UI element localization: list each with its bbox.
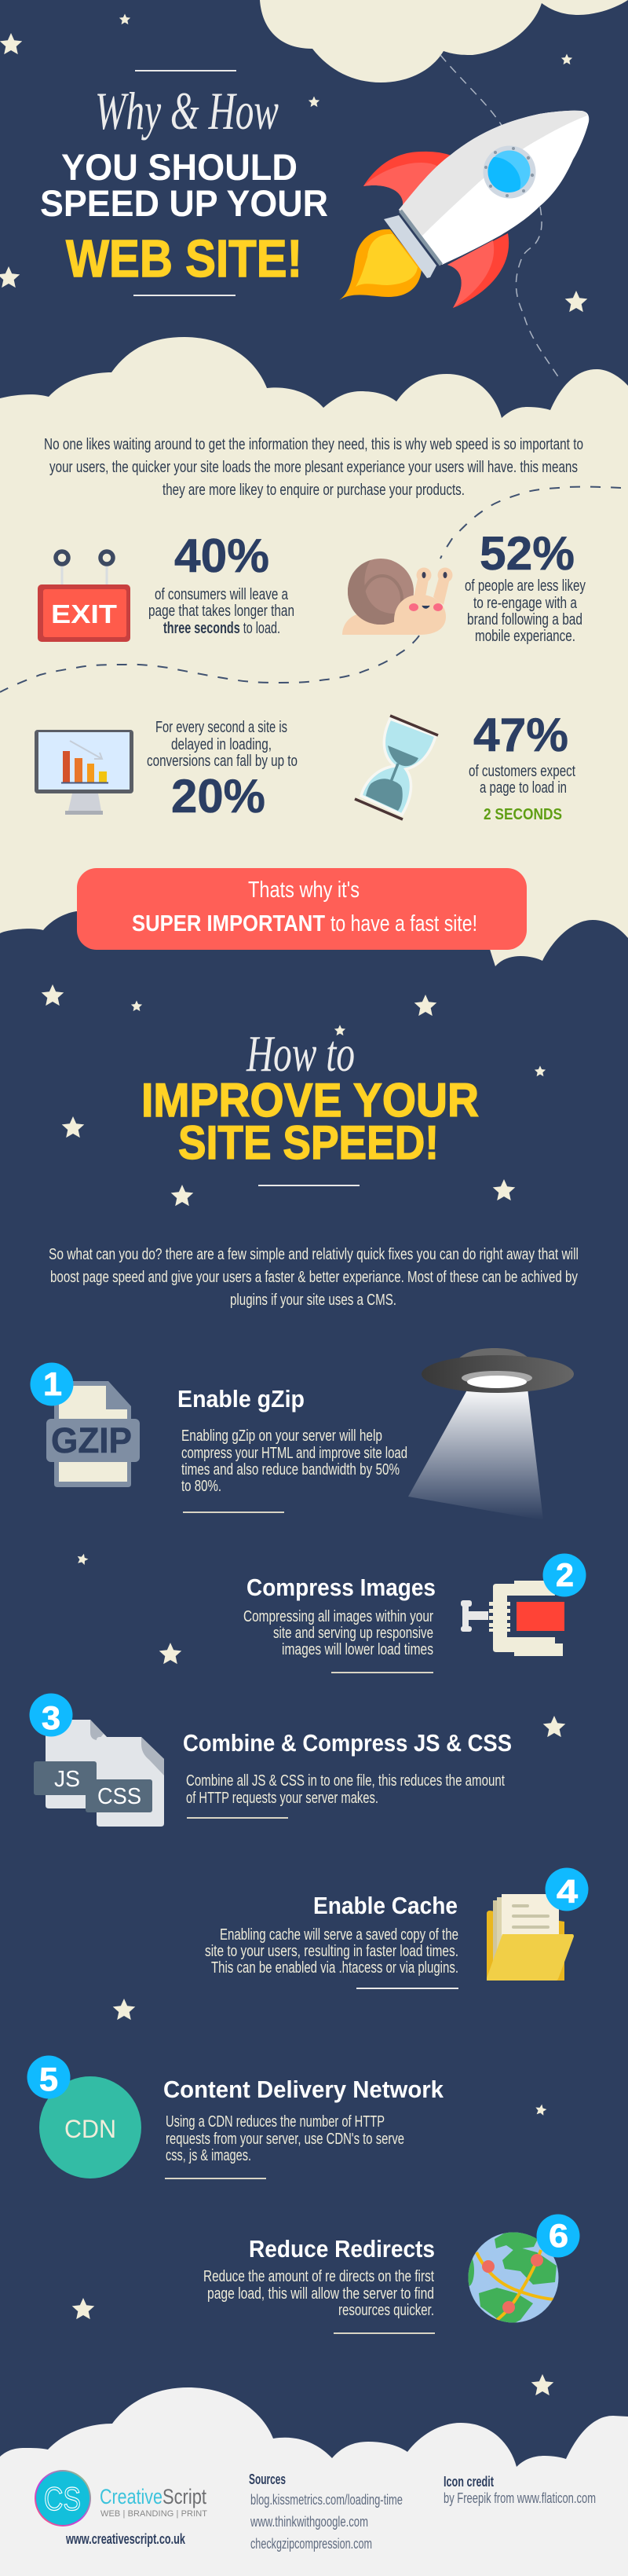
callout pill: SUPER IMPORTANT (132, 911, 325, 936)
icon: js and css files: JS (54, 1767, 80, 1792)
badge 1: 1 (43, 1365, 62, 1402)
step 4: enable cache: Enable Cache (313, 1892, 458, 1919)
stat: 52 percent: mobile experiance. (475, 628, 575, 645)
badge 3: 3 (42, 1699, 60, 1736)
cream section with cloud edge (0, 337, 628, 974)
hero title (40, 70, 328, 296)
callout pill: to have a fast site! (330, 911, 477, 936)
badge 5 (27, 2055, 71, 2099)
icon: gzip file: GZIP (51, 1420, 132, 1460)
icon: rocket (339, 111, 589, 308)
stat: 20 percent: For every second a site is (155, 719, 287, 736)
stat: 40 percent (148, 529, 294, 637)
step 1: enable gzip: to 80%. (181, 1478, 221, 1495)
step 3: combine and compress (183, 1729, 512, 1819)
stat: 47 percent: 47% (473, 709, 568, 761)
step 2: compress images: Compress Images (246, 1574, 436, 1601)
badge 3 (30, 1694, 72, 1736)
step 5: content delivery network: css, js & images. (166, 2147, 251, 2164)
section heading: How to (246, 1025, 355, 1083)
step 6: reduce redirects (203, 2235, 435, 2334)
step 6: reduce redirects: resources quicker. (338, 2302, 434, 2319)
sources: Sources (249, 2472, 286, 2487)
icon: clamp compressing image (461, 1581, 564, 1656)
step 2: compress images: site and serving up responsive (273, 1625, 433, 1642)
stat: 40 percent: page that takes longer than (148, 603, 294, 620)
sources (249, 2472, 403, 2552)
section intro paragraph: plugins if your site uses a CMS. (230, 1292, 396, 1309)
stat: 40 percent: 40% (174, 529, 269, 582)
step 3: combine and compress: Combine all JS & CSS in to one file, this reduces the amount (186, 1772, 505, 1790)
stat: 40 percent: of consumers will leave a (155, 586, 289, 603)
stat: 52 percent: brand following a bad (467, 611, 582, 628)
step 5: content delivery network: Content Delivery Network (163, 2076, 444, 2103)
dashed rocket trail (440, 55, 560, 380)
stat: 20 percent (147, 719, 298, 823)
icon: cdn circle: CDN (64, 2115, 116, 2143)
badge 1 (30, 1362, 74, 1406)
step 4: enable cache: This can be enabled via .htacess or via plugins. (211, 1959, 458, 1977)
step 6: reduce redirects: Reduce Redirects (249, 2235, 435, 2263)
badge 6: 6 (549, 2217, 568, 2254)
badge 4 (545, 1868, 589, 1911)
icon credit: Icon credit (444, 2474, 494, 2490)
step 5: content delivery network: Using a CDN reduces the number of HTTP (166, 2113, 385, 2131)
callout pill: Thats why it's (248, 878, 360, 903)
badge 2: 2 (556, 1556, 574, 1593)
title line: why and how: Why & How (95, 81, 279, 141)
logo: creativescript: CS (44, 2480, 81, 2517)
badge 5: 5 (39, 2061, 58, 2098)
stat: 20 percent: 20% (171, 770, 265, 823)
step 3: combine and compress: Combine & Compress JS & CSS (183, 1729, 512, 1757)
callout pill (77, 868, 527, 950)
stat: 47 percent: a page to load in (480, 779, 567, 797)
icon: snail (342, 559, 452, 635)
step 6: reduce redirects: Reduce the amount of re directs on the first (203, 2268, 434, 2285)
icon credit (444, 2474, 596, 2506)
title line: you should: YOU SHOULD (61, 146, 298, 188)
icon: exit sign (38, 551, 130, 642)
icon: gzip file (46, 1381, 140, 1487)
sources: checkgzipcompression.com (250, 2536, 372, 2552)
step 2: compress images: images will lower load times (282, 1641, 433, 1658)
stat: 47 percent: of customers expect (469, 763, 575, 780)
badge 4: 4 (557, 1873, 579, 1910)
logo: creativescript: Script (162, 2485, 206, 2508)
step 2: compress images: Compressing all images within your (243, 1608, 433, 1625)
stat: 20 percent: conversions can fall by up to (147, 753, 298, 770)
stars: how to section (42, 984, 546, 1206)
logo: creativescript: Creative (100, 2485, 162, 2508)
stat: 47 percent: 2 SECONDS (484, 806, 562, 823)
stat: 20 percent: delayed in loading, (171, 736, 272, 753)
step 1: enable gzip: Enabling gZip on your server will help (181, 1427, 382, 1445)
step 4: enable cache: Enabling cache will serve a saved copy of the (220, 1926, 458, 1944)
step 3: combine and compress: of HTTP requests your server makes. (186, 1790, 378, 1807)
step 4: enable cache (205, 1892, 458, 1989)
logo: creativescript (35, 2470, 207, 2547)
icon: exit sign: EXIT (51, 599, 117, 628)
title line: speed up your: SPEED UP YOUR (40, 182, 328, 224)
step 1: enable gzip: compress your HTML and improve site load (181, 1445, 407, 1462)
icon: folder with documents (487, 1894, 574, 1981)
section heading (141, 1025, 479, 1186)
top cloud (260, 0, 628, 82)
section heading: SITE SPEED! (178, 1116, 439, 1169)
step 5: content delivery network (163, 2076, 444, 2179)
section intro paragraph (49, 1246, 579, 1309)
logo: creativescript: www.creativescript.co.uk (65, 2531, 186, 2547)
navy section cloud (0, 911, 628, 2576)
footer cloud (0, 2387, 628, 2576)
badge 2 (543, 1554, 586, 1596)
step 1: enable gzip: times and also reduce bandwidth by 50% (181, 1461, 400, 1479)
icon: ufo with light beam (408, 1348, 574, 1520)
step 4: enable cache: site to your users, resulting in faster load times. (205, 1943, 458, 1960)
stat: 52 percent: of people are less likey (465, 577, 586, 595)
intro paragraph (44, 436, 583, 499)
stars: hero (0, 14, 587, 312)
icon: cdn circle (39, 2076, 141, 2178)
icon: js and css files (34, 1720, 164, 1827)
stat: 52 percent: to re-engage with a (473, 595, 578, 612)
stat: 40 percent: three seconds to load. (163, 620, 280, 637)
step 2: compress images (243, 1574, 436, 1673)
step 1: enable gzip (177, 1385, 407, 1513)
icon: globe with routes (468, 2233, 559, 2322)
section heading: IMPROVE YOUR (141, 1074, 479, 1127)
icon: js and css files: CSS (97, 1784, 141, 1809)
sources: blog.kissmetrics.com/loading-time (250, 2492, 403, 2508)
sources: www.thinkwithgoogle.com (250, 2514, 368, 2530)
stat: 47 percent (469, 709, 575, 823)
title line: web site: WEB SITE! (66, 229, 302, 288)
stars: steps lower (72, 1999, 553, 2395)
badge 6 (537, 2214, 579, 2258)
icon: monitor with falling chart (35, 730, 133, 815)
stat: 52 percent (465, 527, 586, 645)
stat: 52 percent: 52% (480, 527, 575, 580)
icon: hourglass (355, 716, 438, 819)
step 6: reduce redirects: page load, this will allow the server to find (207, 2285, 434, 2303)
dashed path: stats (0, 487, 621, 692)
step 5: content delivery network: requests from your server, use CDN's to serve (166, 2131, 404, 2148)
intro paragraph: they are more likey to enquire or purchase your products. (162, 482, 465, 499)
logo: creativescript: WEB | BRANDING | PRINT (100, 2509, 207, 2519)
step 1: enable gzip: Enable gZip (177, 1385, 305, 1413)
stars: steps upper (76, 1552, 565, 1737)
